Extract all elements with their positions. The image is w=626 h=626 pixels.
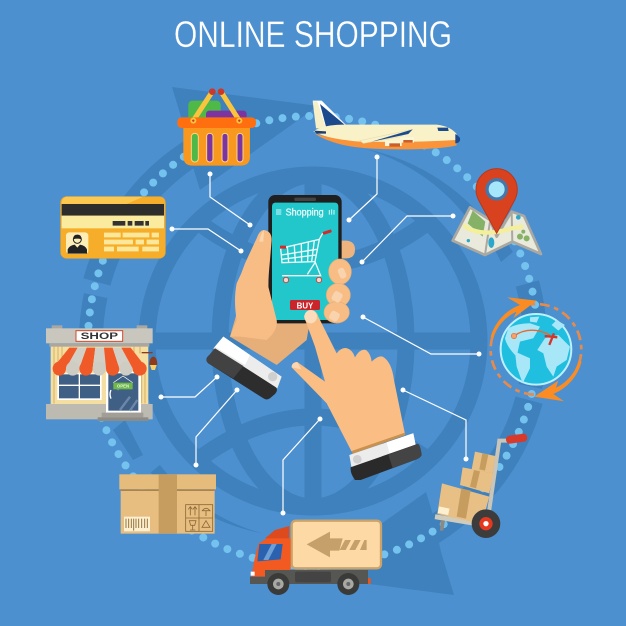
title: ONLINE SHOPPING: [174, 14, 452, 55]
icon: shop storefront: [46, 325, 157, 421]
dotted orbit ring: [88, 116, 538, 566]
background globe wireframe: [147, 175, 479, 507]
icon: cardboard box: [119, 474, 216, 534]
icon: shop storefront: SHOP: [81, 331, 118, 341]
phone body: Shopping: [286, 207, 324, 218]
left shirt cuff and sleeve: [206, 337, 282, 399]
icon: shop storefront: OPEN: [117, 384, 129, 389]
buy button: BUY: [297, 300, 314, 310]
thumb and fingers in front of phone: [230, 230, 351, 340]
holding hand back and fingers behind phone: [230, 241, 355, 365]
pointing hand: [292, 310, 405, 454]
icon: airplane: [313, 101, 460, 149]
icon: globe with delivery arrows: [478, 291, 594, 407]
smartphone held in hands: [206, 195, 422, 480]
icon: map with location pin: [453, 169, 541, 255]
phone body: [268, 195, 342, 323]
icon: delivery truck: [250, 521, 381, 595]
circular arrows background: [91, 87, 535, 595]
connector lines: [158, 154, 482, 516]
icon: shopping basket: [177, 88, 256, 166]
icon: hand truck with boxes: [435, 433, 528, 538]
shopping cart: [280, 229, 332, 283]
icon: credit card: [61, 197, 165, 258]
right shirt cuff and sleeve: [349, 433, 422, 480]
